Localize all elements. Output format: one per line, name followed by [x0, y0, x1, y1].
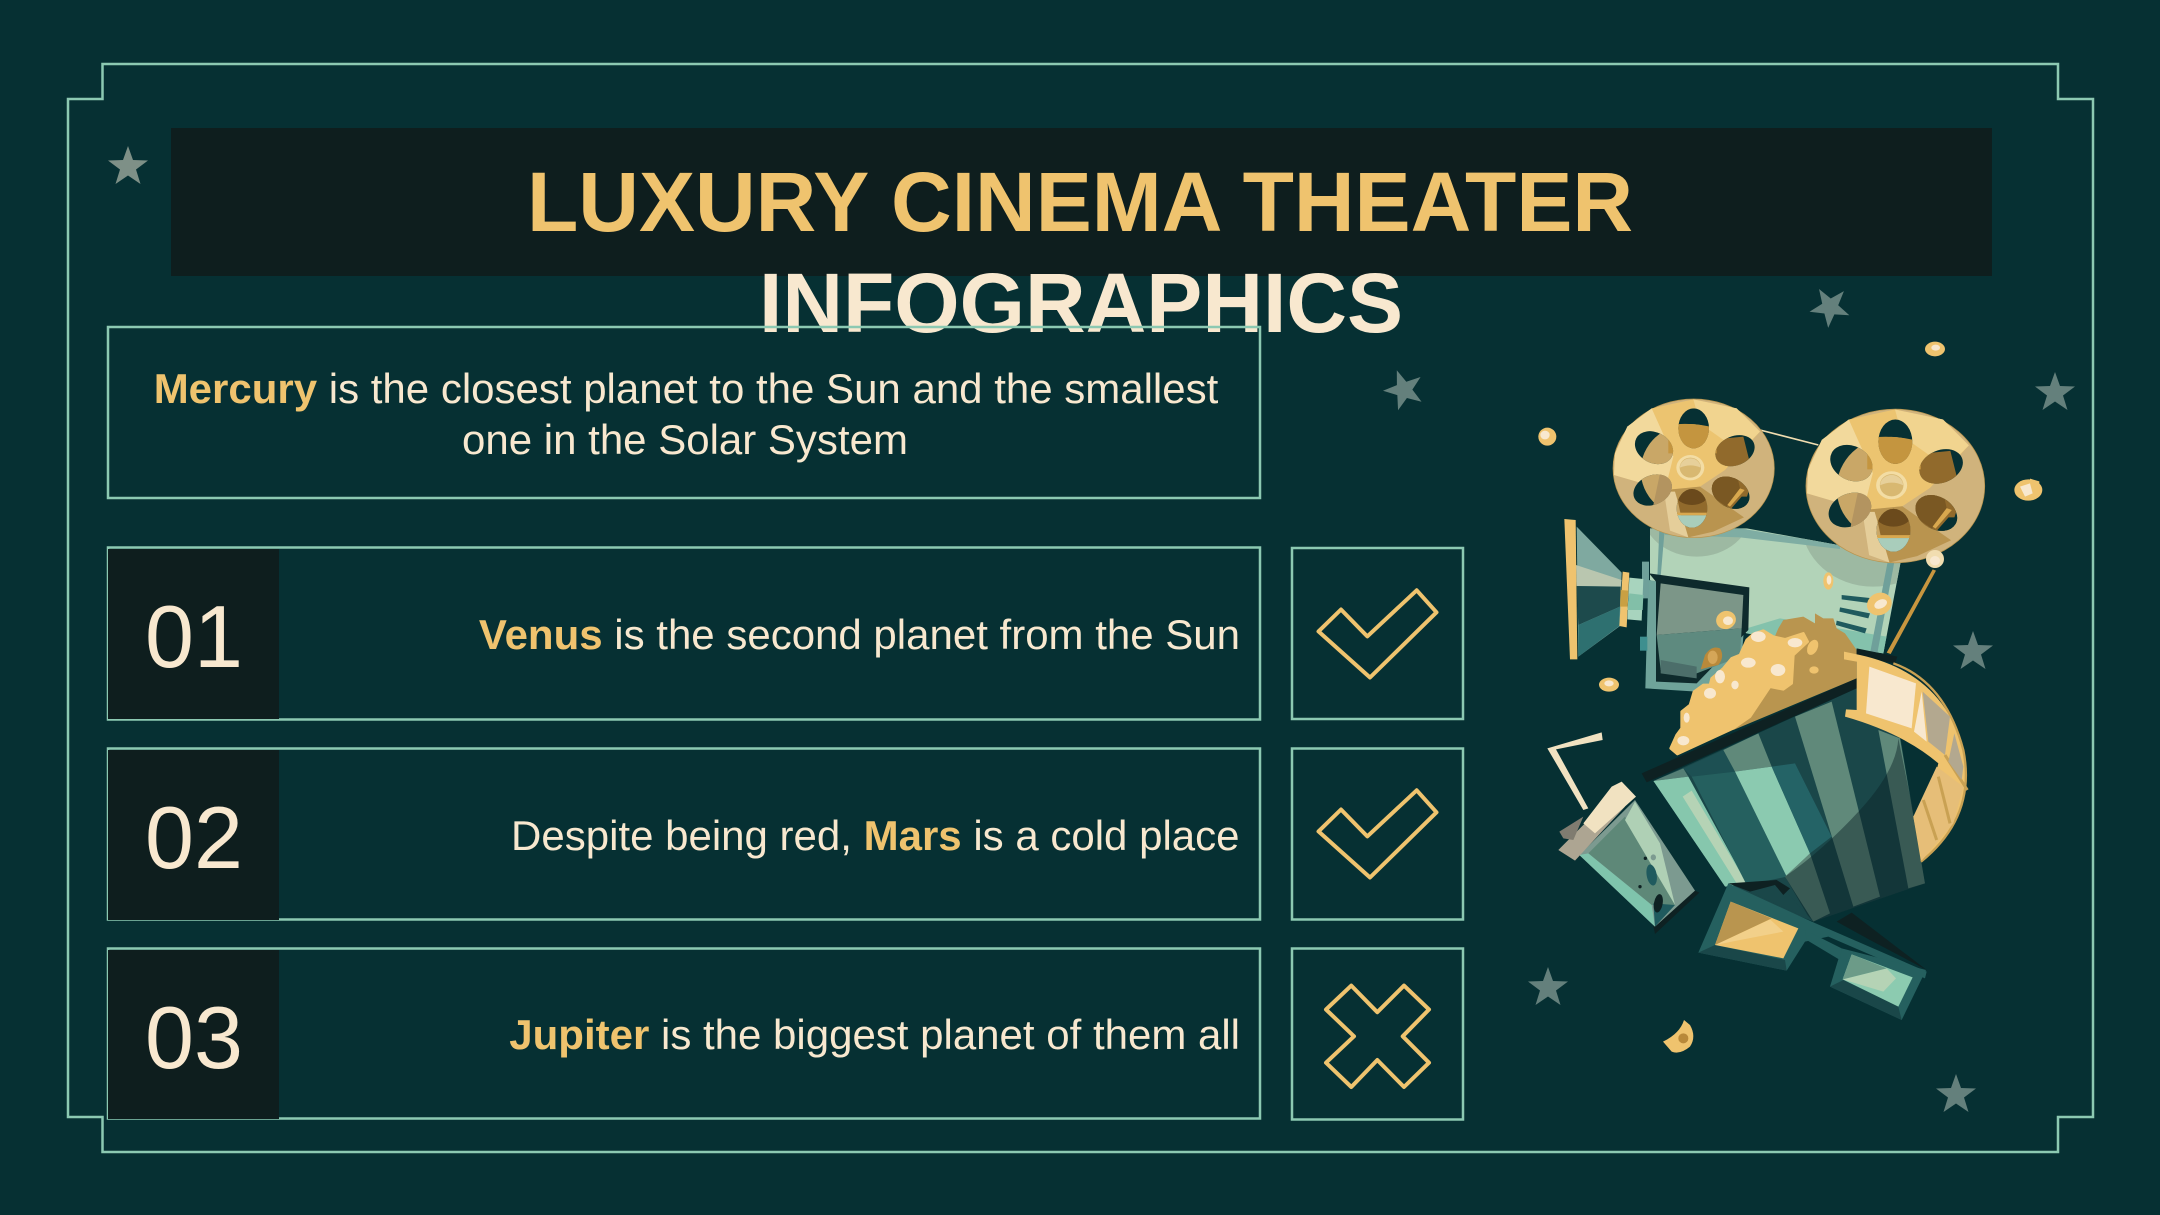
check box 1 [1292, 548, 1463, 719]
illustration: popcorn bucket [1642, 648, 1930, 927]
panel: Mercury intro: one in the Solar System [462, 416, 908, 463]
title bar [171, 128, 1992, 276]
row 02: 02 [145, 788, 243, 887]
row 01 [108, 548, 1260, 720]
title: INFOGRAPHICS [759, 256, 1403, 350]
illustration: cinema collage [1538, 342, 2042, 1053]
stars [108, 146, 2075, 1112]
illustration: 3D glasses [1698, 880, 1927, 1020]
illustration: film reel left [1613, 399, 1774, 538]
title: LUXURY CINEMA THEATER [527, 155, 1633, 249]
cross box 3 [1292, 948, 1463, 1120]
row 03 [108, 948, 1260, 1119]
illustration: film reel belt [1760, 430, 1860, 450]
title [527, 155, 1633, 350]
row 01: 01 [145, 587, 243, 686]
illustration: drink cup [1547, 732, 1699, 934]
row 03: Jupiter is the biggest planet of them all [509, 1011, 1240, 1058]
illustration: popcorn [1671, 613, 1857, 754]
row 01: Venus is the second planet from the Sun [479, 611, 1240, 658]
illustration: film reel right [1806, 409, 1985, 563]
row 03: 03 [145, 988, 243, 1087]
panel: Mercury intro [108, 327, 1260, 498]
illustration: popcorn kernels [1538, 342, 2042, 1053]
row 02 [108, 748, 1260, 920]
illustration: film strip [1844, 652, 1967, 862]
panel: Mercury intro: Mercury is the closest planet to the Sun and the smallest [154, 365, 1219, 412]
illustration: film projector [1564, 519, 1936, 692]
row 02: Despite being red, Mars is a cold place [511, 812, 1240, 859]
check box 2 [1292, 748, 1463, 920]
